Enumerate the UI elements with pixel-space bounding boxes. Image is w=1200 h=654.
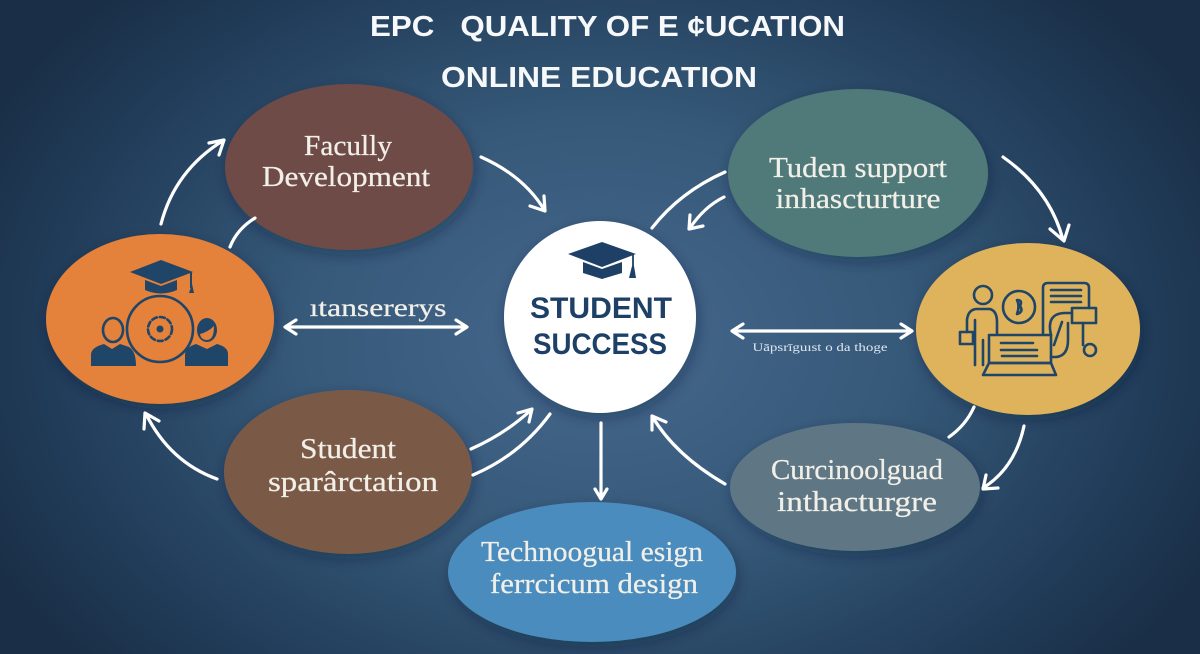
panel: student success hub (504, 221, 696, 413)
arrow: hub to technology (595, 423, 607, 499)
arrow: yellow to curriculum (983, 426, 1024, 489)
arrow: hub to support (652, 172, 725, 228)
panel: student support infrastructure: Tuden support (769, 153, 947, 184)
title (370, 11, 845, 94)
arrow: student to orange (144, 413, 217, 479)
arrow: support to yellow (1003, 157, 1069, 241)
arrow: student to hub upper (471, 409, 532, 449)
icon: graduation cap (568, 242, 636, 279)
label: support note: Uāpsrīguıst o da thoge (752, 340, 888, 354)
panel: technological curriculum design: ferrcicum design (490, 569, 698, 600)
panel: student success hub: SUCCESS (533, 328, 667, 361)
panel: student support infrastructure (728, 89, 988, 257)
panel: orange teaching icon (46, 234, 274, 404)
panel: student participation: Student (300, 434, 396, 465)
panel: technological curriculum design: Technoogual esign (481, 537, 703, 568)
icon: graduation cap and people (91, 260, 228, 366)
arrow: right double arrow (732, 324, 912, 338)
panel: faculty development: Facully (304, 131, 392, 162)
panel: student success hub: STUDENT (530, 292, 672, 325)
panel: faculty development (225, 84, 473, 250)
panel: curriculum infrastructure: Curcinoolguad (771, 455, 943, 486)
arrow: curriculum to hub (652, 416, 725, 484)
panel: yellow resources icon (916, 243, 1140, 415)
arrow: yellow to curriculum short arc (949, 407, 974, 437)
arrow: left double arrow (285, 320, 467, 334)
arrow: orange to faculty (161, 140, 224, 224)
arrow: faculty to hub (481, 157, 545, 211)
title: EPC QUALITY OF E ¢UCATION (370, 11, 845, 43)
panel: curriculum infrastructure (730, 423, 980, 551)
panel: student participation: sparârctation (268, 467, 438, 498)
title: ONLINE EDUCATION (441, 62, 757, 94)
arrow: support to hub (689, 197, 724, 229)
panel: student participation (224, 390, 472, 554)
panel: faculty development: Development (262, 162, 430, 193)
panel: technological curriculum design (448, 502, 736, 642)
arrow: student to hub lower (473, 414, 550, 475)
label: transfers: ıtansererys (310, 295, 446, 322)
icon: person, laptop and document (960, 283, 1096, 375)
panel: student support infrastructure: inhascturture (776, 184, 940, 215)
panel: curriculum infrastructure: inthacturgre (777, 487, 937, 518)
arrow: orange short arc (230, 218, 255, 247)
